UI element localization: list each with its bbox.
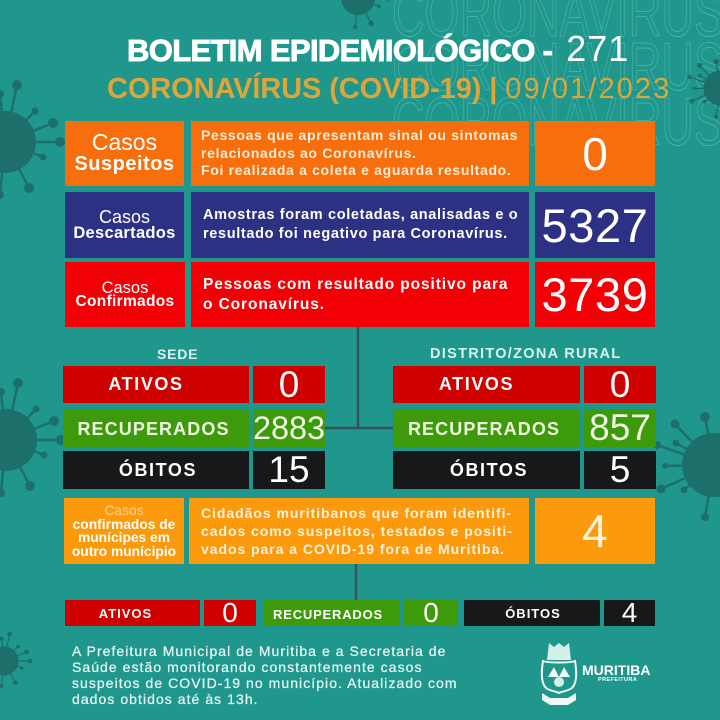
panel: casos suspeitos description: Foi realizada a coleta e aguarda resultado. xyxy=(201,162,511,178)
subtitle: CORONAVÍRUS (COVID-19) | 09/01/2023 xyxy=(107,73,671,105)
bottom obitos label xyxy=(464,600,600,626)
panel: municipes description: cados como suspeitos, testados e positi- xyxy=(201,523,513,539)
sede ativos value: 0 xyxy=(279,364,299,404)
title: BOLETIM EPIDEMIOLÓGICO - 271 xyxy=(127,28,629,69)
footer note: dados obtidos até às 13h. xyxy=(72,691,259,707)
panel: casos confirmados label: Casos xyxy=(102,278,148,296)
rural obitos value: 5 xyxy=(610,449,630,490)
footer note: suspeitos de COVID-19 no município. Atualizado com xyxy=(72,675,458,691)
panel: casos descartados label: Casos xyxy=(99,206,150,226)
sede ativos value xyxy=(253,366,325,403)
sede ativos label: ATIVOS xyxy=(108,374,184,394)
sede obitos label xyxy=(63,451,249,489)
panel: municipes label: munícipes em xyxy=(78,530,170,545)
footer note xyxy=(72,643,458,707)
panel: casos suspeitos value: 0 xyxy=(582,128,608,180)
bottom obitos value: 4 xyxy=(622,597,637,628)
panel: casos confirmados label: Confirmados xyxy=(76,292,174,310)
sede recuperados value: 2883 xyxy=(253,410,325,446)
rural ativos label: ATIVOS xyxy=(439,374,514,394)
heading: distrito/zona rural: DISTRITO/ZONA RURAL xyxy=(430,346,621,362)
bottom ativos label xyxy=(65,600,200,626)
panel: casos descartados value: 5327 xyxy=(542,198,648,252)
panel: municipes label xyxy=(64,498,184,564)
panel: municipes value: 4 xyxy=(582,505,608,557)
sede obitos value: 15 xyxy=(268,449,310,490)
panel: casos descartados label xyxy=(65,192,184,258)
footer note: A Prefeitura Municipal de Muritiba e a Secretaria de xyxy=(72,643,446,659)
bottom recuperados label: RECUPERADOS xyxy=(273,606,383,622)
panel: municipes label: confirmados de xyxy=(73,516,175,532)
bottom recuperados value xyxy=(404,600,458,626)
bottom ativos value: 0 xyxy=(222,597,238,628)
sede recuperados label xyxy=(63,409,249,447)
rural ativos value: 0 xyxy=(610,364,630,404)
panel: casos confirmados description xyxy=(191,262,529,327)
panel: casos suspeitos label xyxy=(65,121,184,186)
panel: casos suspeitos description: relacionados ao Coronavírus. xyxy=(201,145,417,161)
rural recuperados label xyxy=(393,409,580,447)
sede obitos label: ÓBITOS xyxy=(119,460,197,480)
panel: casos confirmados label xyxy=(65,262,185,327)
bottom ativos label: ATIVOS xyxy=(99,606,152,620)
rural ativos value xyxy=(584,366,656,403)
icon: municipal coat of arms xyxy=(540,643,578,705)
panel: municipes description: vados para a COVID-19 fora de Muritiba. xyxy=(201,541,505,557)
bottom obitos label: ÓBITOS xyxy=(505,606,561,620)
panel: casos suspeitos description: Pessoas que apresentam sinal ou sintomas xyxy=(201,127,518,143)
bottom recuperados label xyxy=(263,600,399,626)
panel: municipes description xyxy=(189,498,529,564)
bottom obitos value xyxy=(604,600,655,626)
panel: casos confirmados description: o Coronavírus. xyxy=(203,296,325,312)
logo text: MURITIBA xyxy=(582,662,650,678)
rural obitos label xyxy=(393,451,580,489)
sede recuperados label: RECUPERADOS xyxy=(77,418,230,438)
bottom ativos value xyxy=(204,600,256,626)
rural ativos label xyxy=(393,366,580,403)
panel: casos suspeitos value xyxy=(535,121,655,186)
sede ativos label xyxy=(63,366,249,403)
heading: sede: SEDE xyxy=(157,346,198,362)
rural recuperados label: RECUPERADOS xyxy=(408,418,560,438)
panel: casos suspeitos description xyxy=(191,121,529,186)
panel: municipes label: outro munícipio xyxy=(72,544,176,558)
panel: casos confirmados value: 3739 xyxy=(542,268,648,321)
panel: municipes description: Cidadãos muritibanos que foram identifi- xyxy=(201,505,512,521)
panel: casos suspeitos label: Suspeitos xyxy=(74,152,175,174)
bottom recuperados value: 0 xyxy=(423,597,439,628)
panel: casos descartados description: resultado foi negativo para Coronavírus. xyxy=(203,226,508,242)
panel: casos descartados description: Amostras foram coletadas, analisadas e o xyxy=(203,207,518,223)
panel: casos descartados label: Descartados xyxy=(73,224,176,242)
sede obitos value xyxy=(253,451,325,489)
panel: casos descartados description xyxy=(191,192,529,258)
rural obitos label: ÓBITOS xyxy=(450,460,528,480)
logo subtitle: PREFEITURA xyxy=(598,677,637,683)
panel: municipes label: Casos xyxy=(104,503,144,518)
panel: casos confirmados description: Pessoas com resultado positivo para xyxy=(203,276,508,292)
rural obitos value xyxy=(584,451,656,489)
panel: casos suspeitos label: Casos xyxy=(92,128,157,154)
footer note: Saúde estão monitorando constantemente casos xyxy=(72,659,423,675)
rural recuperados value: 857 xyxy=(589,407,651,448)
panel: municipes value xyxy=(535,498,655,564)
